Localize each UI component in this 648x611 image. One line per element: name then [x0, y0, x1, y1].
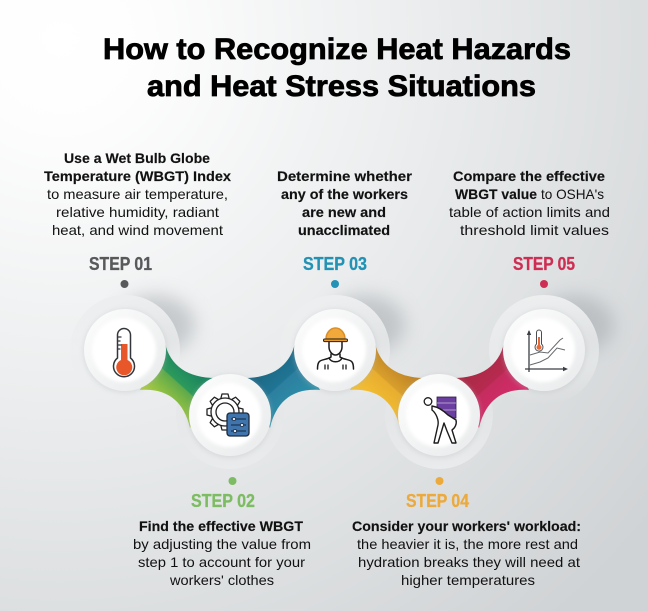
connector: green: [140, 343, 216, 428]
step 01 text: [44, 150, 231, 238]
step 05 text: [449, 168, 610, 238]
icon: person carrying boxes: [424, 397, 456, 443]
step 03 label: [303, 254, 367, 288]
connector: yellow: [350, 343, 426, 428]
step 01 text: relative humidity, radiant: [56, 204, 219, 220]
circle 1: thermometer: [83, 309, 167, 393]
icon: chart with thermometer: [525, 330, 568, 372]
step 03 text: any of the workers: [281, 186, 408, 202]
step 04 text: higher temperatures: [401, 572, 535, 588]
step 02 label: STEP 02: [191, 491, 255, 511]
step 02 text: [133, 518, 311, 588]
step 04 text: hydration breaks they will need at: [358, 554, 580, 570]
step 04 label: STEP 04: [406, 491, 469, 511]
step 04 text: Consider your workers' workload:: [352, 518, 581, 534]
step 04 text: [352, 518, 581, 588]
step 01 text: heat, and wind movement: [52, 222, 223, 238]
step 01 text: Use a Wet Bulb Globe: [64, 150, 210, 166]
connector: crimson: [453, 343, 529, 428]
step 02 text: step 1 to account for your: [138, 554, 305, 570]
step 02 text: workers' clothes: [169, 572, 274, 588]
step 04 text: the heavier it is, the more rest and: [357, 536, 578, 552]
ring shadows: [70, 295, 614, 469]
connector: blue: [244, 343, 320, 428]
step 03 text: unacclimated: [298, 222, 390, 238]
step 01 text: Temperature (WBGT) Index: [44, 168, 231, 184]
step 05 text: WBGT value: [455, 186, 537, 202]
step 03 text: Determine whether: [277, 168, 413, 184]
step 05 text: to OSHA's: [541, 186, 604, 202]
icon: gear: [207, 394, 249, 436]
circle 4: person carrying load: [397, 374, 481, 458]
step 02 text: Find the effective WBGT: [139, 518, 303, 534]
step 03 text: are new and: [302, 204, 386, 220]
circle 3: worker: [293, 309, 377, 393]
step 05 text: table of action limits and: [449, 204, 610, 220]
icon: worker with hard hat: [318, 328, 354, 369]
title: [103, 33, 571, 103]
step 04 label: [406, 477, 469, 511]
step 01 label: [89, 254, 152, 288]
step 01 label: STEP 01: [89, 254, 152, 274]
step 03 text: [277, 168, 413, 238]
circle 5: temperature chart: [502, 309, 586, 393]
icon: thermometer: [114, 328, 135, 377]
step 05 label: STEP 05: [513, 254, 575, 274]
step 05 text: Compare the effective: [453, 168, 605, 184]
title: How to Recognize Heat Hazards: [103, 33, 571, 66]
step 01 text: to measure air temperature,: [47, 186, 228, 202]
step 05 text: threshold limit values: [460, 222, 609, 238]
step 02 label: [191, 477, 255, 511]
title: and Heat Stress Situations: [147, 70, 536, 103]
step 05 label: [513, 254, 575, 288]
step 03 label: STEP 03: [303, 254, 367, 274]
circle 2: gear and sliders: [188, 374, 272, 458]
step 02 text: by adjusting the value from: [133, 536, 311, 552]
